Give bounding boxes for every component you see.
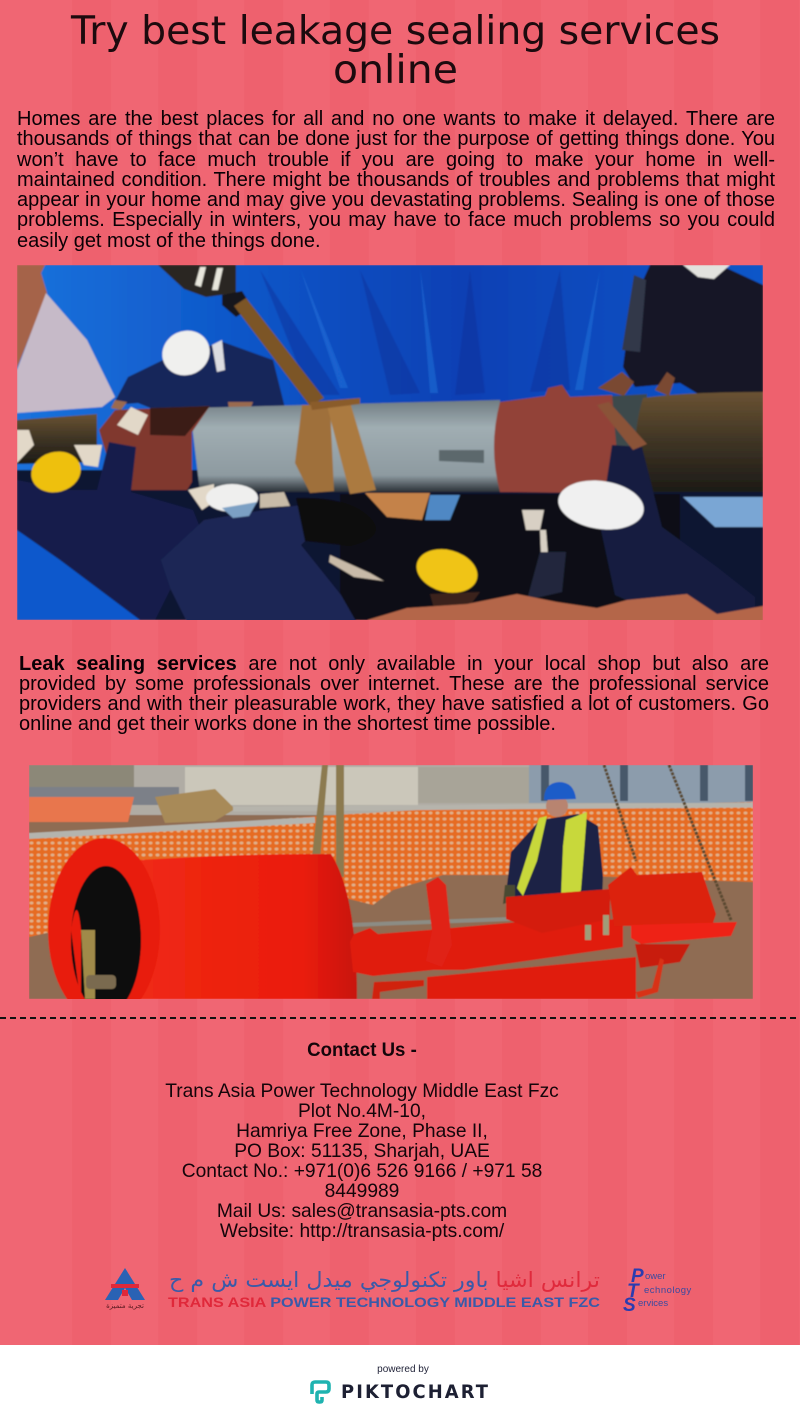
contact details: 8449989: [325, 1181, 399, 1202]
orange safety mesh: [29, 802, 753, 937]
PTS logo: [623, 1266, 692, 1316]
lifting hook: [158, 265, 252, 317]
second paragraph: [19, 653, 769, 735]
PTS logo: echnology: [644, 1285, 692, 1296]
powered by label: powered by: [377, 1364, 429, 1375]
centre worker with white helmet: [161, 484, 384, 640]
photo: workers fitting a clamp on a pipeline: [17, 265, 763, 620]
red flange: [48, 838, 160, 1022]
top right worker: [598, 265, 763, 396]
chains: [604, 765, 731, 920]
gearbox: [608, 867, 737, 968]
icon: Piktochart logo mark: [310, 1380, 331, 1404]
PTS logo: P: [631, 1266, 644, 1287]
contact details: Website: http://transasia-pts.com/: [220, 1221, 504, 1242]
second paragraph: Leak sealing services are not only available in your local shop but also are: [19, 653, 769, 675]
title: [70, 9, 720, 93]
contact details: Contact No.: +971(0)6 526 9166 / +971 58: [182, 1161, 542, 1182]
intro paragraph: [17, 108, 775, 252]
lifting straps: [312, 765, 344, 877]
arabic company name: ترانس اشيا باور تكنولوجي ميدل ايست ش م ح: [169, 1268, 600, 1292]
contact details: [165, 1081, 559, 1242]
title: online: [333, 48, 458, 93]
blue tarp: [17, 265, 763, 500]
base plate and legs: [372, 957, 664, 999]
photo: engineer with red hot tapping machine: [29, 765, 753, 999]
right worker with white helmet: [522, 402, 755, 617]
red sealing clamps: [99, 385, 620, 493]
second paragraph: online and get their works done in the shortest time possible.: [19, 713, 556, 735]
second paragraph: providers and with their pleasurable work, they have satisfied a lot of customers. Go: [19, 693, 769, 715]
top centre worker: [111, 323, 288, 420]
PTS logo: ervices: [638, 1298, 668, 1309]
footer: powered by Piktochart: [0, 1345, 800, 1425]
intro paragraph: won’t have to face much trouble if you are going to make your home in well-: [17, 149, 775, 171]
icon: triangle logo: تجرية متميزة: [106, 1302, 144, 1310]
intro paragraph: problems. Especially in winters, you may have to face much problems so you could: [17, 209, 775, 231]
company logos: [105, 1266, 692, 1314]
worker with yellow helmet at bottom: [412, 543, 482, 612]
second paragraph: provided by some professionals over internet. These are the professional service: [19, 673, 769, 695]
pipeline: [17, 392, 763, 493]
contact details: Plot No.4M-10,: [298, 1101, 426, 1122]
english company name: TRANS ASIA POWER TECHNOLOGY MIDDLE EAST FZC: [168, 1294, 600, 1310]
soil mound: [367, 594, 763, 640]
dashed divider: [0, 1017, 800, 1019]
engineer in hi-vis vest: [503, 782, 603, 910]
PTS logo: ower: [645, 1271, 666, 1282]
dark area below the pipe: [17, 470, 763, 620]
contact details: Hamriya Free Zone, Phase II,: [236, 1121, 488, 1142]
lifting straps: [234, 298, 376, 494]
intro paragraph: easily get most of the things done.: [17, 230, 321, 252]
PTS logo: T: [627, 1281, 640, 1302]
contact details: PO Box: 51135, Sharjah, UAE: [234, 1141, 490, 1162]
title: Try best leakage sealing services: [70, 9, 720, 54]
Piktochart wordmark: PIKTOCHART: [341, 1381, 490, 1403]
contact details: Trans Asia Power Technology Middle East Fzc: [165, 1081, 559, 1102]
rails: [29, 805, 753, 925]
intro paragraph: maintained condition. There might be thousands of troubles and problems that might: [17, 169, 775, 191]
intro paragraph: thousands of things that can be done just for the purpose of getting things done. You: [17, 128, 775, 150]
red drum body: [139, 854, 357, 999]
intro paragraph: appear in your home and may give you devastating problems. Sealing is one of those: [17, 189, 775, 211]
contact details: Mail Us: sales@transasia-pts.com: [217, 1201, 507, 1222]
left worker with yellow helmet: [17, 407, 214, 620]
icon: triangle logo: [105, 1268, 145, 1310]
shaft and frame: [350, 877, 623, 976]
contact heading: Contact Us -: [307, 1040, 417, 1061]
intro paragraph: Homes are the best places for all and no one wants to make it delayed. There are: [17, 108, 775, 130]
site background: [29, 765, 753, 999]
